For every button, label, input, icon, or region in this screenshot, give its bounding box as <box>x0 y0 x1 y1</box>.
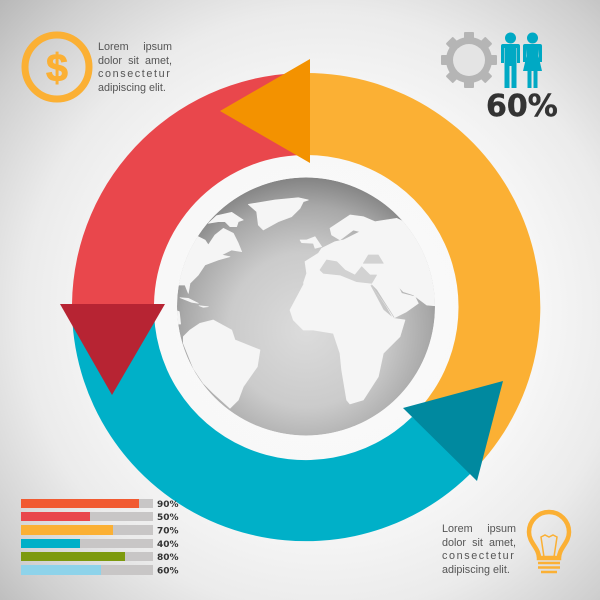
icon: gear <box>441 32 497 88</box>
text block: bottom right: adipiscing elit. <box>442 564 510 576</box>
60% label: 60% <box>486 89 558 124</box>
British Isles <box>300 237 322 248</box>
ring segment: teal <box>72 304 475 541</box>
arrow: dark teal <box>403 381 503 481</box>
icon: light bulb <box>529 512 569 572</box>
bar chart: 60% <box>157 566 179 576</box>
text block: top left: adipiscing elit. <box>98 82 166 94</box>
bar chart: 70% <box>157 526 179 536</box>
bar chart <box>21 499 179 576</box>
icon: dollar coin <box>25 35 89 99</box>
text block: bottom right <box>442 523 516 576</box>
ring segment: orange <box>306 73 540 466</box>
text block: bottom right: dolor sit amet, <box>442 536 516 548</box>
western land masses <box>175 198 308 307</box>
Africa <box>290 275 405 404</box>
icon: woman <box>523 32 542 88</box>
Arctic islands <box>208 212 243 227</box>
text block: top left <box>98 41 172 94</box>
bar chart: 50% <box>157 513 179 523</box>
South America <box>183 320 260 408</box>
text block: top left: Lorem ipsum <box>98 41 172 53</box>
Eurasia and seas <box>300 215 443 318</box>
ring segment: red <box>72 73 310 304</box>
Caribbean islands <box>180 298 198 303</box>
Red Sea <box>372 285 394 317</box>
Greenland <box>248 198 308 230</box>
Central America <box>177 310 181 324</box>
North America <box>175 228 242 293</box>
icon: man <box>501 32 520 88</box>
Eurasia <box>303 215 443 318</box>
globe <box>175 178 443 436</box>
text block: bottom right: consectetur <box>442 550 515 562</box>
bar chart: 90% <box>157 500 179 510</box>
arrow: dark red <box>60 304 165 395</box>
Black Sea <box>363 255 383 263</box>
bar chart: 80% <box>157 553 179 563</box>
text block: top left: dolor sit amet, <box>98 54 172 66</box>
arrow: orange <box>220 59 310 163</box>
icon: dollar coin: $ <box>46 47 68 90</box>
text block: bottom right: Lorem ipsum <box>442 523 516 535</box>
bar chart: 40% <box>157 540 179 550</box>
text block: top left: consectetur <box>98 68 171 80</box>
Mediterranean Sea <box>320 260 377 283</box>
